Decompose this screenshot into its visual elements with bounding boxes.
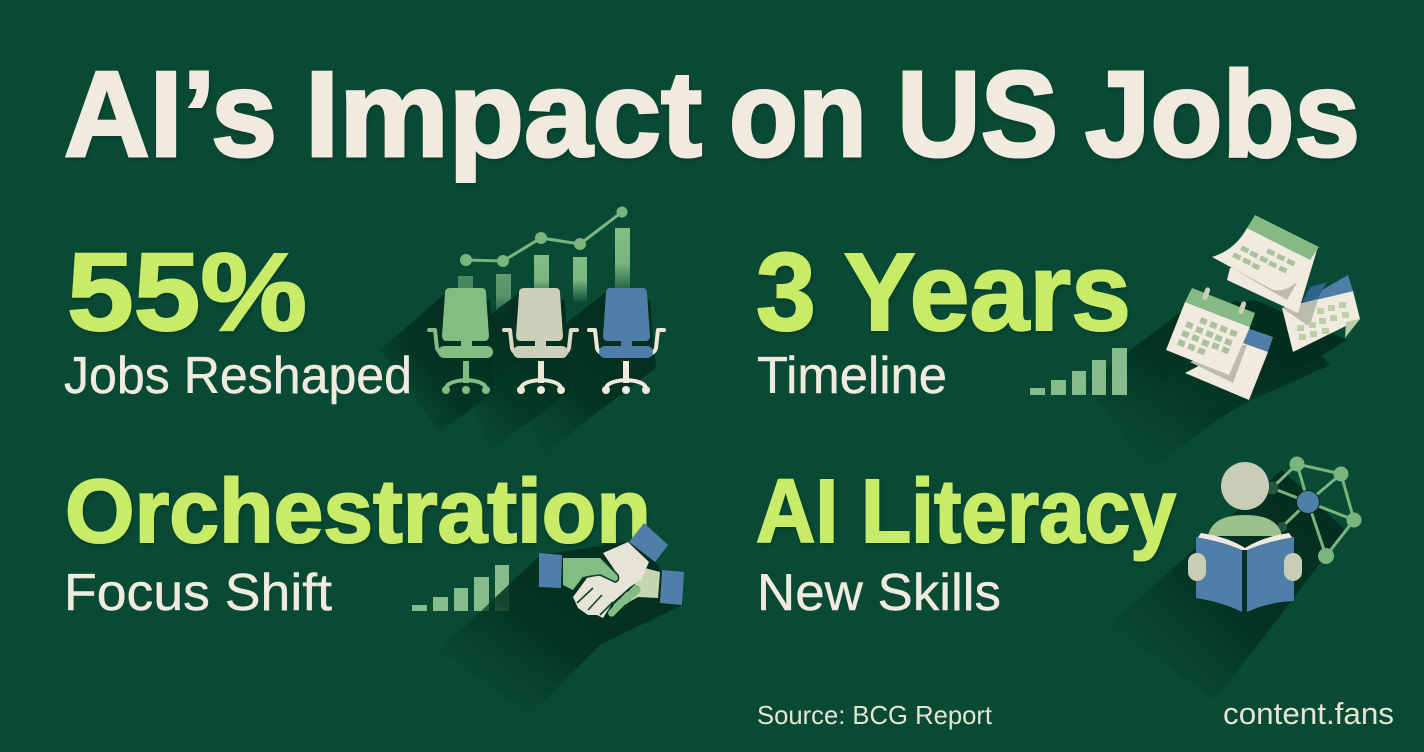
bar chart behind chairs [458,228,630,318]
stat: AI Literacy [756,462,1176,622]
title: US [897,46,1058,182]
signal bars: timeline [1030,348,1127,395]
stat label: New Skills [757,564,1001,622]
calendar top [1212,215,1319,313]
title [64,46,1360,182]
title: Jobs [1085,46,1360,182]
finger lines [577,560,619,615]
hands [1188,553,1206,581]
hand cream [573,542,649,618]
icon: calendars [1166,215,1360,400]
stat label: Jobs Reshaped [64,347,412,405]
icon: reader with network [1188,456,1362,612]
hand left green [563,558,619,590]
stat value: 3 Years [756,231,1131,354]
stat value: 55% [67,231,307,354]
brand: content.fans [1223,696,1394,731]
stat label: Timeline [757,347,947,405]
cuff top [629,523,668,562]
trend line [460,207,627,266]
chair green [429,288,493,394]
cuff left [539,553,562,588]
title: on [729,46,867,182]
head [1221,462,1269,510]
calendar right [1282,275,1360,352]
icon: handshake [539,523,684,618]
title: AI’s [64,46,277,182]
stat value: AI Literacy [756,462,1176,562]
stat value: Orchestration [65,462,651,562]
source: Source: BCG Report [757,700,993,730]
calendar left [1166,287,1273,400]
open book [1196,537,1294,612]
hand right pale [622,568,660,606]
title: Impact [305,46,702,182]
book pages [1196,533,1294,556]
network hub [1296,490,1320,514]
stat label: Focus Shift [64,564,333,622]
fingers green [607,583,642,618]
icon: chairs with trend chart [429,207,664,394]
torso [1208,515,1282,536]
stat: 3 Years [756,231,1131,405]
cuff right [660,570,684,605]
stat: Orchestration [64,462,651,622]
network [1266,456,1362,564]
long shadows [380,292,1347,715]
chair cream [504,288,577,394]
stat: 55% [64,231,412,405]
signal bars: orchestration [412,565,509,611]
chair blue [589,288,664,394]
